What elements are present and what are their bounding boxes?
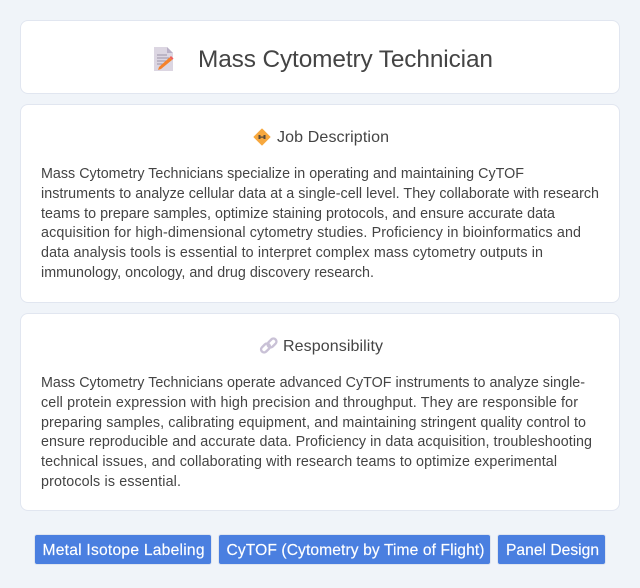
text block: job description — [41, 166, 599, 281]
tag: panel design: Panel Design — [506, 542, 599, 559]
icon: document with pencil — [154, 47, 174, 71]
text block: responsibility — [41, 375, 592, 490]
text block: responsibility: preparing samples, calibrating equipment, and maintaining stringent quality control to — [41, 415, 586, 431]
icon: diamond sign — [254, 128, 270, 146]
heading: job description: Job Description — [277, 129, 389, 146]
tag: metal isotope labeling: Metal Isotope Labeling — [42, 542, 204, 559]
text block: job description: teams to prepare samples, optimize staining protocols, and ensure accurate data — [41, 206, 555, 222]
text block: job description: data analysis tools is essential to interpret complex mass cytometry outputs in — [41, 245, 543, 261]
text block: responsibility: cell protein expression with high precision and throughput. They are responsible for — [41, 395, 578, 411]
text block: responsibility: Mass Cytometry Technicians operate advanced CyTOF instruments to analyze single- — [41, 375, 585, 391]
tag: panel design — [497, 534, 606, 565]
text block: job description: immunology, oncology, and drug discovery research. — [41, 265, 374, 281]
tag: cytof — [218, 534, 491, 565]
text block: job description: Mass Cytometry Technicians specialize in operating and maintaining CyTOF — [41, 166, 524, 182]
panel: job description — [20, 104, 620, 303]
title: Mass Cytometry Technician — [198, 46, 493, 73]
text block: responsibility: protocols is essential. — [41, 474, 181, 490]
panel: title card — [20, 20, 620, 94]
tag: metal isotope labeling — [34, 534, 212, 565]
icon: chain link — [260, 337, 278, 354]
tag: cytof: CyTOF (Cytometry by Time of Flight) — [226, 542, 484, 559]
text block: responsibility: ensure reproducible and accurate data. Proficiency in data acquisition, troubleshooting — [41, 434, 592, 450]
heading: responsibility: Responsibility — [283, 338, 383, 355]
text block: responsibility: technical issues, and collaborating with research teams to optimize experimental — [41, 454, 557, 470]
panel: responsibility — [20, 313, 620, 511]
text block: job description: instruments to analyze cellular data at a single-cell level. They collaborate with research — [41, 186, 599, 202]
text block: job description: acquisition for high-dimensional cytometry studies. Proficiency in bioinformatics and — [41, 225, 581, 241]
